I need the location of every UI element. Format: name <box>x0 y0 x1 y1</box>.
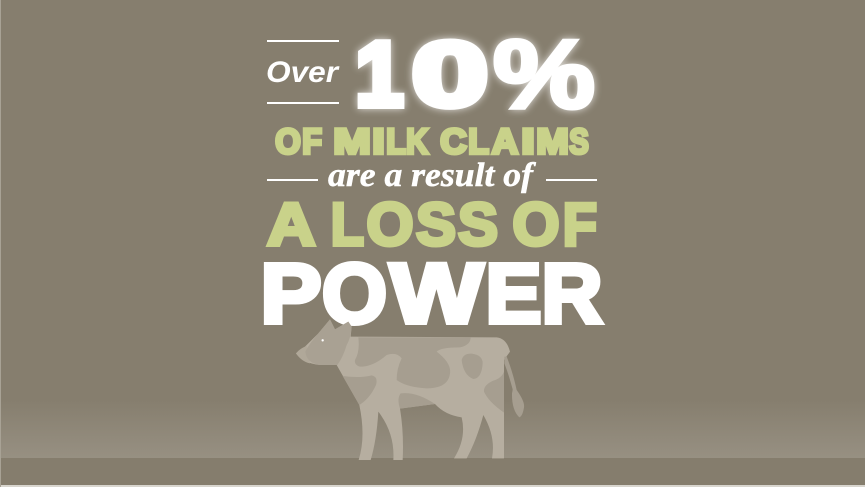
headline: 10%: % <box>493 20 595 128</box>
cow back spot <box>355 337 471 388</box>
heading: a loss of: L <box>331 191 364 258</box>
heading: of milk claims: K <box>406 122 428 162</box>
cow chest spot <box>343 375 377 405</box>
bottom edge <box>0 485 865 487</box>
text: Over: Over <box>266 56 340 89</box>
text: are a result of: are a result of <box>328 157 537 194</box>
heading: a loss of: F <box>563 191 597 258</box>
heading: of milk claims: O <box>275 122 301 162</box>
heading: of milk claims: I <box>521 122 535 162</box>
heading: of milk claims: M <box>536 122 569 162</box>
rule above Over <box>267 40 339 42</box>
ground <box>1 458 865 485</box>
heading: power: P <box>260 246 322 340</box>
left edge <box>0 0 1 487</box>
heading: power: E <box>486 246 542 340</box>
heading: a loss of: O <box>366 191 414 258</box>
cow tail <box>504 357 524 417</box>
cow flank spot <box>462 354 483 379</box>
headline: 10%: 1 <box>356 24 404 126</box>
heading: of milk claims: F <box>302 122 322 162</box>
heading: of milk claims: I <box>372 122 385 162</box>
heading: of milk claims: M <box>333 122 371 162</box>
heading: of milk claims: L <box>386 122 406 162</box>
rule right of are a result of <box>546 179 597 181</box>
cow rump spot <box>484 372 504 413</box>
cow eye <box>321 339 324 341</box>
heading: of milk claims: C <box>440 122 467 162</box>
heading: of milk claims: L <box>468 122 489 162</box>
rule below Over <box>267 102 339 104</box>
cow belly spot <box>398 393 435 409</box>
heading: a loss of: S <box>458 191 498 258</box>
cow head patch <box>305 319 352 365</box>
heading: a loss of: O <box>512 191 560 258</box>
rule left of are a result of <box>267 179 318 181</box>
headline: 10%: 0 <box>412 24 488 126</box>
heading: of milk claims: S <box>569 122 589 162</box>
heading: power: R <box>542 246 602 340</box>
cow muzzle <box>296 346 310 363</box>
horizon glow <box>1 400 865 458</box>
heading: a loss of: A <box>267 191 314 258</box>
heading: power: W <box>390 246 484 340</box>
heading: of milk claims: A <box>492 122 518 162</box>
heading: a loss of: S <box>416 191 456 258</box>
cow body <box>296 319 510 460</box>
icon: cow <box>296 319 524 460</box>
heading: power: O <box>322 246 387 340</box>
